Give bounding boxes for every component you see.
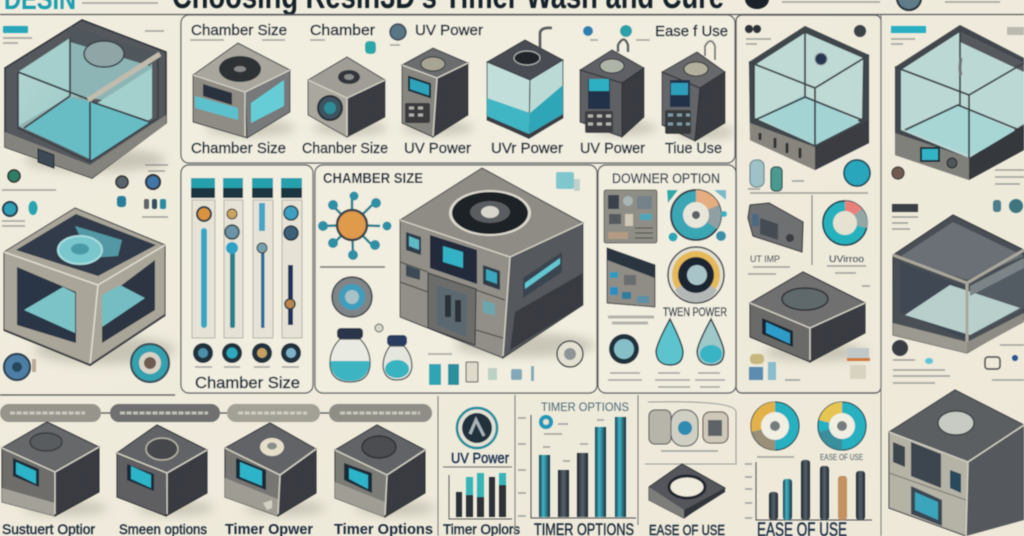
device: flat curing unit <box>750 272 865 362</box>
device: uv power 2 <box>580 40 657 137</box>
device: option cube 1 <box>2 422 107 516</box>
bars <box>531 415 636 518</box>
text: caption blocks: UT IMP <box>750 254 780 264</box>
bars <box>745 460 872 520</box>
icon grid <box>604 190 657 243</box>
icon: dial <box>332 277 372 317</box>
donut: right <box>818 402 866 450</box>
panel: left column <box>2 20 175 382</box>
donut chart <box>823 201 867 245</box>
device: large wash and cure machine <box>400 168 595 358</box>
icons: small accessories <box>428 354 534 385</box>
device: uv water tank <box>487 28 563 139</box>
slider 3 <box>252 178 273 363</box>
slider 4 <box>281 178 302 363</box>
labels: chamber row: Tiue Use <box>665 140 722 157</box>
panel: timer options chart <box>515 395 638 536</box>
labels: chamber row: Chamber Size <box>191 140 286 157</box>
slider 1 <box>191 178 215 363</box>
device: ease of use <box>662 41 735 141</box>
pills <box>0 404 432 422</box>
heading: chamber size: Chamber Size <box>195 375 300 392</box>
panel: power options <box>598 165 736 393</box>
label: uv power: UV Power <box>451 450 509 467</box>
icon: drop one <box>656 319 683 365</box>
gauge <box>668 247 724 303</box>
device: bottom right cube <box>889 390 1024 536</box>
panel: chamber size row <box>181 15 735 163</box>
panel: uv power and mini chart <box>443 408 520 536</box>
donut: left <box>751 402 799 450</box>
device: glass chamber large <box>5 20 166 178</box>
icons: middle bottom <box>749 348 870 380</box>
panel: sliders <box>181 165 313 393</box>
panel: bottom strip options <box>0 404 435 536</box>
slanted control panel <box>607 248 655 307</box>
device: chamber size 2 <box>308 57 388 137</box>
icon: bottle large <box>330 328 370 382</box>
panel: right column <box>889 25 1024 536</box>
labels: chamber row: Chanber Size <box>302 140 388 157</box>
icon: gear hub <box>318 192 392 260</box>
icon: seal at right edge <box>556 172 583 367</box>
icon: bottle small <box>383 335 412 380</box>
legend and axis ticks <box>518 415 604 516</box>
label: twen power: TWEN POWER <box>663 305 727 319</box>
icon: uv lens <box>457 408 497 448</box>
heading: TIMER OPTIONS <box>541 400 629 414</box>
device: glass chamber <box>749 26 869 170</box>
text: micro labels <box>745 25 866 44</box>
donut chart <box>667 190 727 242</box>
panel: centre device <box>315 165 597 393</box>
panel: glass chamber column <box>736 15 881 393</box>
labels: chamber row: UV Power <box>404 140 471 157</box>
heading: DOWNER OPTION <box>612 170 720 186</box>
mini bar chart <box>449 473 512 519</box>
labels: chamber row <box>191 140 722 157</box>
icon: button <box>609 334 639 364</box>
panel: ease of use device <box>645 402 736 536</box>
headings: top row: Chamber <box>310 22 375 39</box>
labels: option row <box>2 521 433 536</box>
device: ring tray <box>649 464 725 518</box>
device: uv power 1 <box>402 48 474 137</box>
labels: chamber row: UVr Power <box>491 140 563 157</box>
icons: three controls <box>649 410 728 451</box>
headings: top row <box>190 22 728 54</box>
device: dark glass chamber <box>893 215 1024 353</box>
slider 2 <box>222 178 243 363</box>
device: option cube 3 <box>225 423 325 516</box>
device: camera unit <box>748 203 803 252</box>
device: option cube 4 <box>335 425 435 517</box>
headings: top row: UV Power <box>415 22 483 39</box>
headings: top row: Chamber Size <box>191 22 287 39</box>
device: dark chamber with platform <box>4 208 175 365</box>
chart captions: EASE OF USE <box>820 453 863 462</box>
device: chamber size 1 <box>193 43 295 138</box>
text: caption blocks: UVirroo <box>829 254 864 264</box>
chart captions <box>757 453 863 462</box>
device: glass chamber right <box>895 25 1024 180</box>
text: caption blocks <box>748 254 870 286</box>
icon: drop two <box>697 319 724 365</box>
icons: middle small row <box>748 160 870 193</box>
heading: CHAMBER SIZE <box>323 170 423 187</box>
text: top-left micro labels <box>3 26 168 171</box>
panel: ease of use charts <box>745 15 881 536</box>
labels: chamber row: UV Power <box>580 140 645 157</box>
text and icons: right micro labels <box>891 26 1024 383</box>
device: option cube 2 <box>117 425 213 516</box>
icons: left small row <box>2 170 168 226</box>
icons: left swirl dials <box>4 344 169 382</box>
headings: top row: Ease f Use <box>655 23 728 40</box>
